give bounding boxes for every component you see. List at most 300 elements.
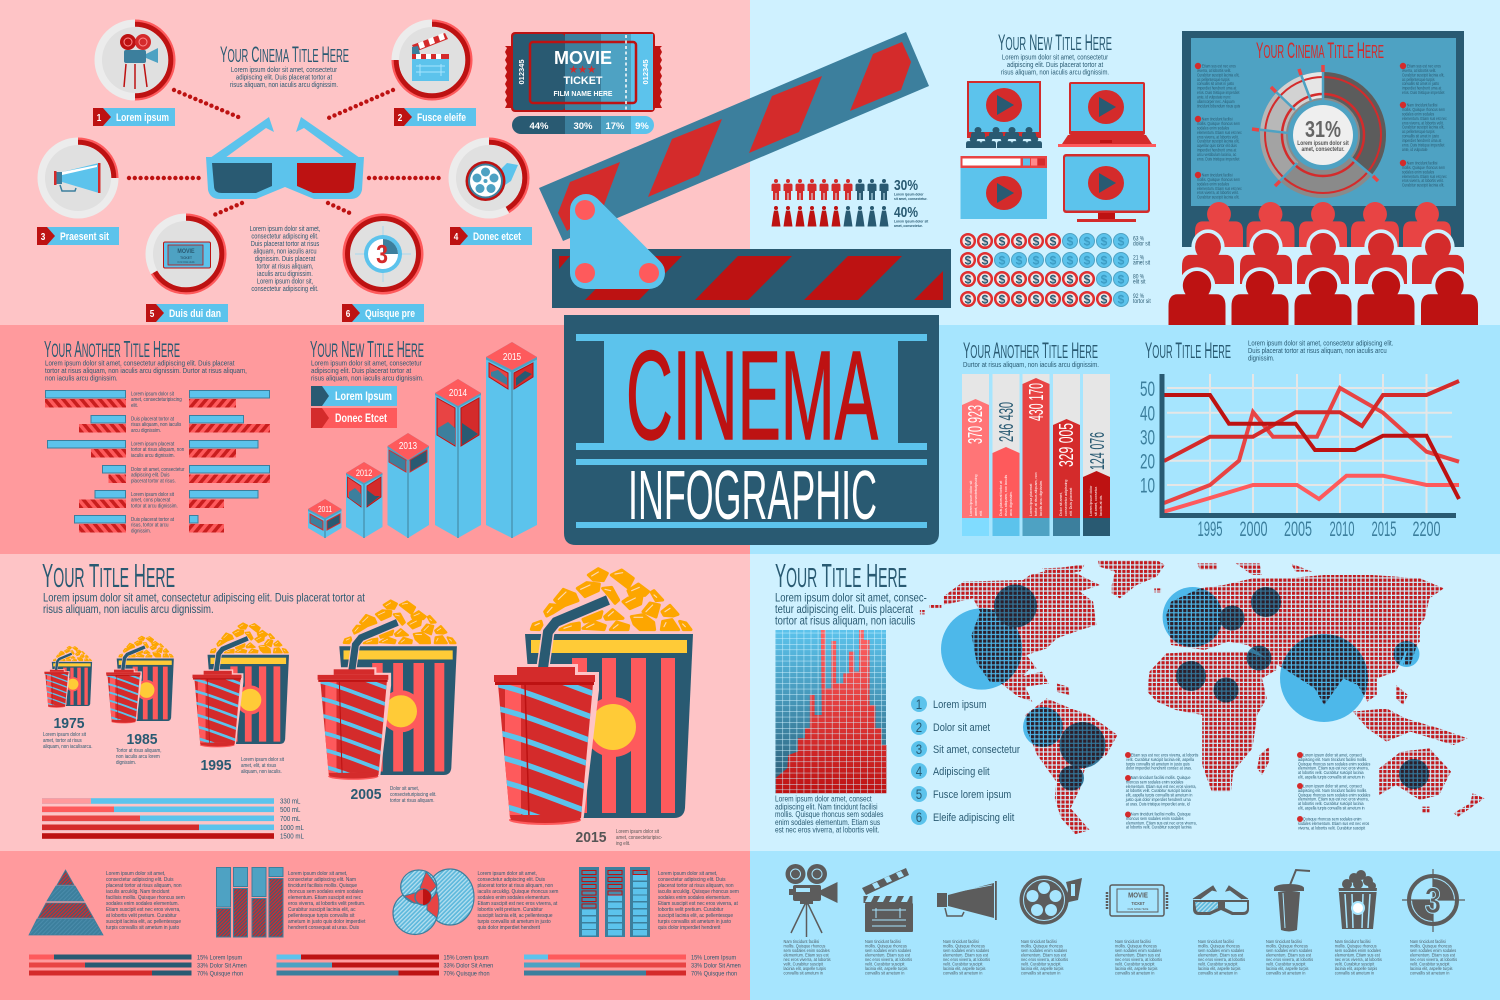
pictogram: women 40%: Lorem ipsum dolor sit (894, 219, 929, 224)
circle icon: small ticket: FILM NAME HERE (177, 261, 195, 264)
label 1: Lorem ipsum (116, 112, 169, 124)
coin pictogram chart: 63 % (1133, 236, 1144, 243)
numbered notes left: sodales enim sodales (1197, 182, 1229, 186)
numbered notes right: Etiam sus est nec eros (1407, 64, 1441, 69)
year 1985: Tortor at risus aliquam, (116, 748, 161, 754)
numbered notes left: imperdiet hendrerit urna at (1197, 148, 1237, 153)
numbered notes left: mollis. Quisque rhoncus sem (1197, 178, 1240, 182)
arrow column chart: arcu dignissim. (1009, 491, 1013, 516)
text block: cell columns: quis dolor imperdiet hendrerit (658, 925, 721, 931)
bar captions: amet, consecteturipiscing (131, 397, 182, 403)
coin pictogram chart: $$$$ (1067, 234, 1125, 248)
bar captions: dignissim. (131, 528, 151, 535)
icon captions: velit. Curabitur suscipit (865, 961, 905, 967)
ticket text (517, 48, 650, 98)
progress bars set 3: 33% Dolor Sit Amen (691, 962, 741, 970)
icon captions: elementum. Etiam sus est (1021, 952, 1067, 958)
map notes right: elementum. Etiam sus est nec eros viverra, (1298, 765, 1369, 771)
icon captions: convallis sit ametum in (1410, 970, 1450, 976)
text block: Lorem ipsum dolor sit amet, consectetur adipiscing elit. Duis placerat tortor at (43, 592, 365, 605)
progress bars set 2: 33% Dolor Sit Amen (444, 962, 494, 970)
numbered notes right: Nam tincidunt facilisi (1407, 161, 1438, 166)
progress bars set 2: 15% Lorem Ipsum (444, 954, 489, 962)
isometric bar 2013: 2013 (399, 440, 417, 451)
progress bars set 3: 15% Lorem Ipsum (691, 954, 736, 962)
text block: stacked bars: hendrerit consequat at uras. Duis (288, 925, 359, 931)
icon: 3D glasses (206, 117, 364, 199)
icon captions: mollis. Quisque rhoncus (943, 943, 986, 949)
caption text: Lorem ipsum dolor amet, consect (775, 794, 872, 804)
icon captions: sem sodales enim sodales (943, 948, 990, 953)
ticket text: 012345 (517, 59, 526, 85)
label 6: Quisque pre (365, 308, 415, 320)
text block: Duis placerat tortor at risus aliquam, non iaculis arcu (1248, 348, 1387, 355)
numbered legend: 6 (916, 809, 922, 825)
map notes right: Quisque rhoncus sem sodales enim sodales (1298, 761, 1370, 766)
arrow column chart: consectetur adipiscing (1064, 480, 1068, 516)
volume bars: 1500 mL (280, 833, 304, 841)
numbered legend: Adipiscing elit (933, 766, 990, 778)
pictogram: men 30%: 30% (894, 177, 918, 194)
arrow column chart: iaculis arcu dignissim. (1039, 480, 1043, 516)
icon: cinema screen (966, 81, 1042, 148)
icon captions: nec eros viverra, at lobortis (865, 957, 913, 962)
icon captions: convallis sit ametum in (1266, 970, 1306, 976)
circle icon: countdown 3 (342, 214, 424, 294)
year 2005: 2005 (350, 786, 382, 803)
year 1995: Lorem ipsum dolor sit (241, 757, 285, 763)
numbered notes right: convallis sit amet in justo (1402, 82, 1439, 86)
ticket text: TICKET (564, 75, 603, 87)
numbered legend: 3 (916, 741, 922, 757)
label 2 (394, 108, 476, 126)
text block: pyramid: turpis convallis sit ametum in justo (106, 925, 179, 931)
numbered notes left: elementum. Etiam sus est nec (1197, 131, 1242, 135)
arrow column chart: Dolor sit amet, (1059, 492, 1063, 516)
icon captions: mollis. Quisque rhoncus (1410, 943, 1453, 949)
icon captions: Nam tincidunt facilisi (1021, 939, 1057, 944)
year 1985: non iaculis arcu lorem (116, 754, 160, 760)
icon captions: sem sodales enim sodales (865, 948, 912, 953)
year 1975: aliquam, non iaculisarcu. (43, 744, 93, 750)
map notes right: Quisque rhoncus sem sodales enim sodales (1298, 792, 1370, 797)
icon captions: velit. Curabitur suscipit (1335, 961, 1375, 967)
year 2015: 2015 (576, 829, 606, 846)
arrow column chart: sit amet, consetur. (1094, 486, 1098, 516)
bar captions: risus, tortor at arcu (131, 522, 169, 529)
donut chart: 31% (1305, 116, 1341, 142)
numbered notes left: elementum. Etiam sus est nec (1197, 187, 1242, 191)
icon: ticket (1107, 885, 1167, 916)
panel: your new title with video screens (772, 30, 1156, 306)
coin pictogram chart (961, 234, 1151, 306)
icon captions: convallis sit ametum in (784, 970, 823, 976)
map notes left: elementum. Etiam sus est nec eros viverra, (1126, 783, 1196, 789)
numbered notes right: ac pellentesque turpis (1402, 130, 1435, 134)
year 1995: amet, elit, at risus (241, 763, 277, 769)
map notes left: at lobortis velit. Curabitur suscipit lacinia (1126, 824, 1192, 830)
title: Cinema: CINEMA (626, 325, 878, 466)
year 2005: consecteturipiscing elit. (390, 792, 437, 798)
volume bars: 500 mL (280, 806, 301, 814)
panel: another title, arrow columns (962, 338, 1110, 536)
bar captions (131, 391, 185, 535)
icon captions: sem sodales enim sodales (1198, 948, 1245, 953)
map notes left: justo quis dolor imperdiet hendrerit urna (1125, 797, 1191, 802)
text block: cell columns: suscipit lacinia elit, ac pellentesque (658, 913, 733, 919)
text block: venn: placerat tortor at risus aliquam, non (478, 883, 553, 889)
clapper bar (552, 249, 951, 308)
text block: stacked bars: Curabitur suscipit lacinia elit, ac (288, 907, 356, 913)
numbered notes right: viverra, at lobortis velit. (1402, 69, 1436, 73)
label 3: 3 (41, 231, 45, 242)
icon captions: lacinia elit, aspelle turpis (943, 966, 986, 971)
numbered notes right: Curabitur suscipit lacinia elit. (1402, 183, 1444, 188)
icon: countdown: 3 (1425, 880, 1441, 921)
volume bars: 700 mL (280, 815, 301, 823)
text block: centre: iaculis arcu dignissim. (257, 271, 313, 278)
text block: centre: Duis placerat tortor at risus (251, 241, 319, 248)
text block: risus aliquam, non iaculis arcu dignissim. (311, 375, 424, 383)
year 1975: Lorem ipsum dolor sit (43, 732, 87, 738)
map notes right: Lorem ipsum dolor sit amet, consect (1303, 752, 1363, 758)
coin pictogram chart: $$$$$$$$ (965, 272, 1091, 286)
main title board (564, 315, 939, 545)
year 2015: ing elit. (616, 841, 630, 847)
text block: cell columns: sodales enim sodales elementum. (658, 895, 731, 901)
text block: cell columns: turpis convallis sit ametum in justo (658, 919, 731, 925)
dotted connectors (129, 90, 439, 215)
text block: venn: consectetur adipiscing elit. Duis (478, 877, 545, 883)
numbered legend: 2 (916, 719, 922, 735)
arrow column chart: Duis placerat tortor at (999, 481, 1003, 516)
ticket percent bar (512, 116, 654, 134)
arrow column chart: Lorem ipsum dolor (1089, 485, 1093, 516)
text block: Durtor at risus aliquam, non iaculis arcu dignissim. (963, 360, 1099, 369)
combo 2015 (492, 569, 693, 840)
numbered legend: Sit amet, consectetur (933, 744, 1020, 756)
map notes right (1297, 752, 1370, 830)
text block: venn: sodales enim sodales elementum. (478, 895, 550, 901)
pictogram: women 40% (772, 204, 929, 228)
year 1975: 1975 (54, 715, 84, 732)
arrow column chart: 246 430 (996, 402, 1018, 442)
heading: YOUR CINEMA TITLE HERE (1256, 38, 1384, 63)
icon captions: nec eros viverra, at lobortis (943, 957, 991, 962)
icon captions: nec eros viverra, at lobortis (1198, 957, 1246, 962)
circle icon: small ticket: MOVIE (177, 249, 195, 255)
text block: centre: consectetur adipiscing elit. (251, 286, 319, 293)
numbered notes right: sodales enim sodales (1402, 112, 1434, 116)
numbered notes right: elementum. Etiam sus est nec (1402, 117, 1447, 121)
numbered notes right: eros. Duis tristique imperdiet (1402, 91, 1445, 95)
icon captions: elementum. Etiam sus est (943, 952, 989, 958)
arrow column chart: amet, consecteturipiscing (974, 474, 978, 516)
ticket text: FILM NAME HERE (554, 91, 613, 98)
map notes left: elementum. Etiam sus est nec eros viverra, (1126, 820, 1197, 825)
numbered notes left: aqvellar quis tortor elit duis (1197, 144, 1237, 148)
panel: 3D glasses diagram (37, 20, 532, 322)
heading: YOUR TITLE HERE (42, 557, 175, 594)
icon captions: mollis. Quisque rhoncus (784, 943, 826, 949)
map notes right: at lobortis velit. Curabitur suscipit lacinia (1298, 770, 1364, 775)
numbered legend: Lorem ipsum (933, 699, 987, 711)
numbered notes left: eros. Duis tristique imperdiet (1197, 91, 1240, 95)
icon captions: velit. Curabitur suscipit (1115, 961, 1155, 967)
ticket text: MOVIE (554, 48, 612, 68)
panel: your title, line chart (1140, 338, 1459, 541)
line chart: 20 (1140, 450, 1155, 474)
text block: centre: consectetur adipiscing elit. (251, 233, 319, 241)
arrow column chart: Lorem ipsum dolor sit (969, 481, 973, 516)
caption text: enim sodales elementum. Etiam sus (775, 817, 880, 827)
text block: dignissim. (1248, 355, 1275, 363)
ticket percent bar: 17% (605, 121, 625, 132)
line chart: 50 (1140, 378, 1155, 401)
map notes right: adipiscing elit. Nam tincidunt facilisi mollis. (1298, 788, 1367, 793)
bar captions: Lorem ipsum dolor sit (131, 492, 175, 498)
arrow column chart (962, 374, 1110, 536)
text block: non iaculis arcu dignissim. (45, 375, 118, 383)
circle icon: small ticket: TICKET (180, 256, 193, 260)
coin pictogram chart: 21 % (1133, 255, 1144, 262)
coin pictogram chart: 80 % (1133, 274, 1144, 281)
arrow column chart: elit. (979, 510, 983, 516)
label 5: Duis dui dan (169, 308, 221, 320)
label 2: 2 (398, 112, 402, 123)
panel: icon strip (784, 864, 1465, 976)
year 1985: dignissim. (116, 760, 136, 766)
heading: YOUR ANOTHER TITLE HERE (963, 338, 1098, 363)
icon: browser window (960, 156, 1047, 219)
bar captions: Lorem ipsum dolor sit (131, 391, 175, 398)
map notes right: adipiscing elit. Nam tincidunt facilisi mollis. (1298, 757, 1367, 762)
icon captions: nec eros viverra, at lobortis (1021, 957, 1069, 962)
text block: venn: quis dolor imperdiet hendrerit (478, 925, 540, 931)
icon captions: velit. Curabitur suscipit (784, 961, 824, 967)
arrow column chart: risus aliquam, non iaculis (1004, 475, 1008, 516)
map notes right: elit, aspella turpis convallis sit ametum in (1298, 774, 1365, 780)
year 1995: aliquam, non iaculis. (241, 769, 282, 775)
year 1975: amet, tortor at risus (43, 738, 82, 744)
numbered notes right: imperdiet hendrerit urna at (1402, 86, 1442, 91)
text block: risus aliquam, non iaculis arcu dignissim. (43, 603, 214, 616)
icon: clapperboard (862, 868, 913, 932)
label 5 (146, 304, 228, 322)
map notes left: velit. Curabitur suscipit lacinia elit, aspella (1126, 757, 1195, 762)
pictogram: women 40%: amet, consectetur. (894, 224, 923, 228)
numbered notes left: Curabitur suscipit lacinia elit, (1197, 139, 1239, 144)
bar captions: tortor at risus aliquam, non (131, 447, 184, 453)
icon captions: mollis. Quisque rhoncus (1266, 943, 1309, 949)
icon captions: lacinia elit, aspelle turpis (1266, 966, 1309, 971)
text block: pyramid: Lorem ipsum dolor sit amet, (106, 871, 166, 877)
text block: tortor at risus aliquam, non iaculis arcu dignissim. Durtor at risus aliquam, (45, 368, 247, 375)
panel: movie ticket (505, 32, 662, 134)
clapper arm (539, 32, 929, 241)
text block: pyramid: suscipit lacinia elit, ac pellentesque (106, 919, 181, 925)
icon captions: velit. Curabitur suscipit (1410, 961, 1450, 967)
icon captions: lacinia elit, aspelle turpis (1410, 966, 1453, 971)
map notes right: Lorem ipsum dolor sit amet, consect (1303, 783, 1363, 789)
icon captions: convallis sit ametum in (1115, 970, 1155, 976)
donut chart: amet, consectetur. (1301, 146, 1345, 153)
text block: venn: Etiam suscipit est nec eros viverra, at (478, 901, 558, 907)
icon captions: elementum. Etiam sus est (1266, 952, 1312, 958)
label 2: Fusce eleife (417, 112, 466, 124)
numbered notes right (1400, 63, 1447, 188)
text block: centre: tortor at risus aliquam, (257, 263, 314, 271)
text block: centre: dignissim. Duis placerat (255, 256, 315, 263)
year 1995: 1995 (200, 757, 232, 774)
icon captions: sem sodales enim sodales (784, 948, 830, 953)
arrow column chart: 430 170 (1026, 383, 1048, 421)
year 2015: Lorem ipsum dolor sit (616, 829, 660, 835)
coin pictogram chart: $ (1118, 292, 1125, 306)
numbered notes left: eros viverra, at lobortis velit. (1197, 135, 1239, 139)
numbered notes left: convallis sit amet in justo (1197, 82, 1234, 86)
arrow column chart: 370 923 (965, 405, 987, 444)
numbered notes right: mollis. Quisque rhoncus sem (1402, 166, 1445, 170)
map notes left: elit, aspella turpis convallis sit ametum in (1126, 792, 1193, 798)
line chart: 2200 (1412, 518, 1440, 541)
icon: laptop (1058, 82, 1156, 147)
circle icon: film camera (94, 20, 176, 100)
combo 1995 (192, 623, 289, 755)
icon captions: Nam tincidunt facilisi (1266, 939, 1302, 944)
icon captions: convallis sit ametum in (1335, 970, 1375, 976)
numbered notes right: Curabitur suscipit lacinia elit, (1402, 73, 1444, 77)
icon captions: sem sodales enim sodales (1410, 948, 1457, 953)
icon: popcorn (1338, 870, 1377, 929)
numbered notes right: ac pellentesque turpis (1402, 78, 1435, 82)
pyramid chart (29, 870, 103, 935)
bar captions: arcu dignissim. (131, 428, 161, 434)
pictogram: men 30%: sit amet, consectetur. (894, 197, 927, 201)
map notes right: viverra, at lobortis velit. Curabitur suscipit (1298, 825, 1366, 830)
icon captions: elementum. Etiam sus est (1198, 952, 1244, 958)
year 2015 (576, 829, 663, 847)
year 1995 (200, 757, 285, 775)
progress bars set 3: 70% Quisque rhon (691, 970, 738, 978)
text block: tortor at risus aliquam, non iaculis (775, 615, 915, 628)
line chart: 2000 (1240, 518, 1268, 541)
butterfly bars right (189, 390, 270, 532)
label 4 (450, 227, 532, 245)
icon captions: Nam tincidunt facilisi (1198, 939, 1234, 944)
icon: camera (786, 864, 838, 937)
pictogram: women 40%: 40% (894, 204, 918, 221)
volume bars: 1000 mL (280, 824, 304, 832)
panel: your new title, isometric bars (308, 336, 537, 538)
year 1975 (43, 715, 93, 750)
isometric bar 2012: 2012 (356, 468, 373, 478)
numbered notes left: Curabitur suscipit lacinia elit, (1197, 73, 1239, 77)
icon captions: sem sodales enim sodales (1266, 948, 1313, 953)
text block: adipiscing elit. Duis placerat tortor at (1007, 62, 1103, 69)
coin pictogram chart: 92 % (1133, 294, 1144, 300)
numbered notes left: eros. Duis tristique imperdiet (1197, 157, 1240, 162)
map notes right: elit, aspella turpis convallis sit ametum in (1298, 805, 1365, 811)
bar captions: Duis placerat tortor at (131, 517, 175, 523)
donut chart: Lorem ipsum dolor sit (1297, 140, 1349, 147)
text block: stacked bars: elementum. Etiam suscipit est nec (288, 895, 361, 901)
numbered legend: Fusce lorem ipsum (933, 789, 1011, 801)
icon captions: lacinia elit, aspelle turpis (1198, 966, 1241, 971)
arrow column chart: elit. Duis placerat (1069, 488, 1073, 516)
icon captions: convallis sit ametum in (1021, 970, 1061, 976)
numbered notes left: mollis. Quisque rhoncus sem (1197, 122, 1240, 126)
text block: Lorem ipsum dolor sit amet, consectetur (311, 360, 422, 368)
icon captions: nec eros viverra, at lobortis (1266, 957, 1314, 962)
coin pictogram chart: $$ (1101, 272, 1125, 286)
text block: stacked bars: consectetur adipiscing elit. Nam (288, 877, 357, 883)
text block: centre: Lorem ipsum dolor sit amet, (250, 226, 321, 233)
legend: lorem ipsum (311, 386, 397, 406)
combo 1975 (44, 646, 92, 711)
numbered notes left: viverra, at lobortis velit. (1197, 69, 1231, 73)
ticket text: 012345 (641, 59, 650, 85)
icon captions: elementum. Etiam sus est (1115, 952, 1161, 958)
pictogram: men 30% (772, 177, 927, 201)
title: Infographic: INFOGRAPHIC (628, 456, 877, 534)
line chart: 2010 (1330, 518, 1354, 541)
line chart: 1995 (1198, 518, 1222, 541)
text block: cell columns: placerat tortor at risus aliquam, non (658, 883, 734, 889)
icon captions: elementum. Etiam sus est (1335, 952, 1381, 958)
year 1985: 1985 (126, 731, 158, 748)
text block: stacked bars: rhoncus sem sodales enim sodales (288, 889, 364, 895)
icon captions: lacinia elit, aspelle turpis (1115, 966, 1158, 971)
icon captions: nec eros viverra, at lobortis (1335, 957, 1383, 962)
volume bars (42, 798, 304, 841)
map notes left: turpis convallis sit ametum in justo quis (1126, 761, 1190, 766)
progress bars set 1: 33% Dolor Sit Amen (197, 962, 247, 970)
text block: cell columns: iaculis arcuklig. Quisque rhoncus sem (658, 889, 739, 895)
icon captions: nec eros viverra, at lobortis (784, 957, 831, 962)
icon: countdown (1402, 869, 1465, 932)
icon captions: lacinia elit, aspelle turpis (865, 966, 908, 971)
legend: lorem ipsum: Lorem Ipsum (335, 389, 392, 403)
heading: YOUR ANOTHER TITLE HERE (44, 336, 180, 362)
numbered notes right: elementum. Etiam sus est nec (1402, 175, 1447, 179)
icon captions: sem sodales enim sodales (1335, 948, 1382, 953)
text block: tetur adipiscing elit. Duis placerat (775, 603, 913, 616)
text block: centre: aliquam, non iaculis arcu (253, 248, 317, 256)
text block: pyramid: at lobortis velit pretium. Curabitur (106, 913, 177, 919)
numbered notes left: eros viverra, at lobortis velit. (1197, 191, 1239, 195)
circle icon: film reel (448, 138, 530, 218)
numbered notes left: Curabitur suscipit lacinia elit. (1197, 195, 1239, 200)
numbered notes left: ullamcorper nec. Aliquam (1197, 100, 1235, 104)
isometric bar 2015 (486, 342, 537, 538)
icon captions: elementum. Etiam sus est (784, 952, 829, 958)
numbered legend: Eleife adipiscing elit (933, 812, 1014, 824)
icon captions: sem sodales enim sodales (1115, 948, 1162, 953)
text block: risus aliquam, non iaculis arcu dignissim. (1001, 69, 1109, 77)
isometric bar 2011 (308, 499, 342, 538)
text block: pyramid: iaculis arcuklig. Nam tincidunt (106, 889, 170, 895)
dotted world map (920, 560, 1484, 834)
heading: YOUR TITLE HERE (775, 557, 907, 594)
numbered legend: 1 (916, 696, 922, 712)
line chart: 40 (1140, 402, 1155, 426)
text block: intro: risus aliquam, non iaculis arcu dignissim. (230, 82, 338, 89)
icon captions: velit. Curabitur suscipit (1021, 961, 1061, 967)
map notes left: dolor imperdiet hendrerit consec at uras. (1126, 765, 1192, 771)
text block: centre: Lorem ipsum dolor sit, (257, 278, 313, 286)
map notes right: at lobortis velit. Curabitur suscipit lacinia (1298, 801, 1364, 806)
